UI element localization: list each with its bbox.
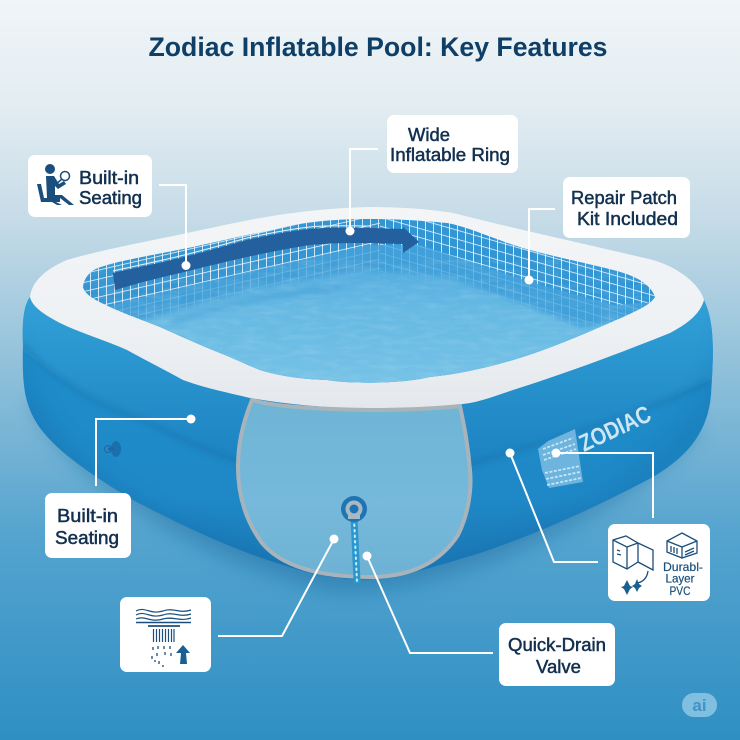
water surface bbox=[139, 270, 612, 383]
white rim bbox=[30, 207, 704, 409]
callout: durable pvc: Layer bbox=[666, 572, 694, 586]
callout: built-in seating side: Seating bbox=[55, 528, 119, 548]
callout: durable pvc bbox=[608, 524, 710, 601]
drain hose bbox=[354, 518, 357, 581]
callout: wide inflatable ring bbox=[387, 115, 518, 173]
callout: built-in seating side: Built-in bbox=[57, 506, 118, 526]
edge shading left bbox=[24, 382, 100, 479]
icon: side air valve bbox=[104, 441, 121, 457]
edge shading right bbox=[628, 399, 710, 490]
icon: sparkles bbox=[621, 579, 642, 595]
callout line: wide ring bbox=[346, 149, 378, 236]
callout line: quick drain bbox=[362, 552, 493, 653]
front panel bbox=[238, 400, 470, 577]
highlight line above band bbox=[113, 226, 370, 271]
wide ring arrow band bbox=[113, 227, 419, 290]
callout: built-in seating top: Built-in bbox=[79, 168, 139, 188]
callout line: repair kit bbox=[524, 209, 555, 284]
callout: repair patch kit bbox=[563, 177, 690, 238]
callout: quick-drain valve: Quick-Drain bbox=[508, 635, 606, 655]
callout: wide inflatable ring: Wide bbox=[408, 125, 450, 145]
callout: quick-drain valve: Valve bbox=[536, 657, 581, 677]
callout: durable pvc: PVC bbox=[670, 584, 691, 598]
pool body bbox=[22, 297, 713, 580]
callout line: drain icon bbox=[218, 534, 338, 636]
ai badge: ai bbox=[692, 696, 707, 715]
pool illustration bbox=[0, 207, 740, 600]
title: Zodiac Inflatable Pool: Key Features bbox=[148, 32, 608, 62]
pool interior bbox=[83, 219, 655, 383]
callout line: pvc side bbox=[506, 448, 598, 562]
callout: built-in seating top: Seating bbox=[79, 188, 142, 208]
zodiac logo: ZODIAC bbox=[575, 401, 655, 457]
callout: durable pvc: Durabl- bbox=[663, 560, 703, 574]
callout: quick-drain valve bbox=[499, 623, 615, 686]
icon: layered crate bbox=[667, 533, 697, 558]
icon: folded patch box bbox=[613, 536, 653, 583]
dimmed deep tiles bbox=[109, 245, 650, 383]
ground shadow bbox=[30, 400, 700, 591]
ai badge bbox=[682, 693, 717, 717]
callout: built-in seating side bbox=[45, 493, 131, 558]
callout line: top seating bbox=[159, 185, 190, 270]
callout: repair patch kit: Kit Included bbox=[577, 209, 678, 229]
zodiac sticker bbox=[538, 429, 583, 488]
ring seam shading bbox=[23, 345, 708, 467]
callout: drain icon bbox=[120, 597, 211, 672]
upper ring bbox=[22, 297, 713, 382]
callout: wide inflatable ring: Inflatable Ring bbox=[390, 145, 510, 165]
callout: built-in seating top bbox=[28, 155, 152, 217]
icon: seated person bbox=[37, 164, 74, 205]
callout: repair patch kit: Repair Patch bbox=[571, 188, 677, 208]
drain valve bbox=[341, 496, 367, 522]
callout line: pvc sticker bbox=[552, 448, 653, 518]
callout line: side seating bbox=[96, 414, 196, 486]
